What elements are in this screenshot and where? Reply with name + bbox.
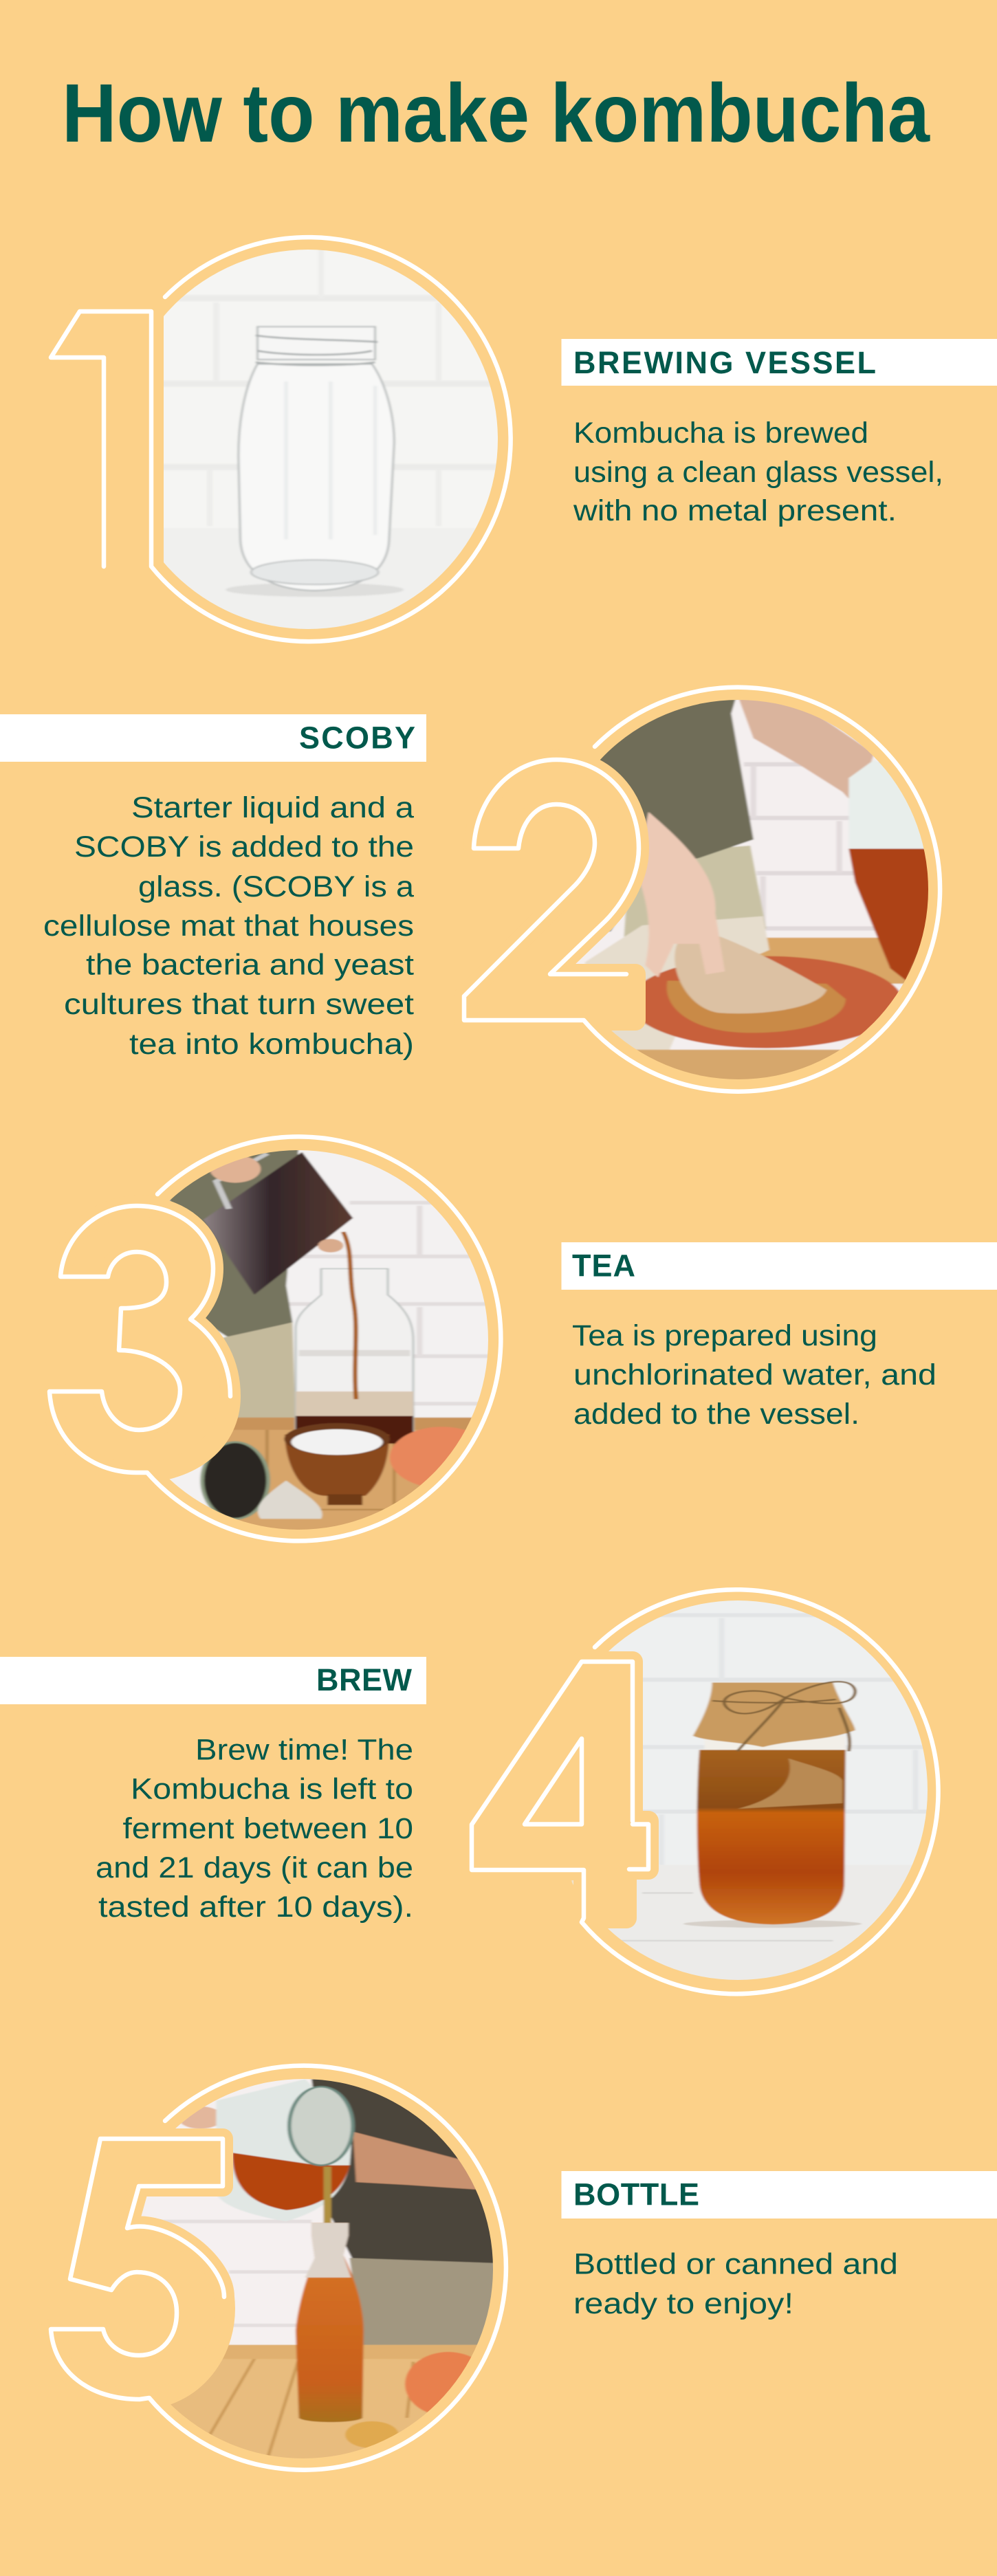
text: scoby description <box>43 791 414 1061</box>
number 1 <box>51 237 511 641</box>
text: brewing vessel description: Kombucha is brewed <box>573 417 868 450</box>
text: brew description: Brew time! The <box>195 1734 413 1767</box>
heading bar: bottle: BOTTLE <box>573 2177 699 2212</box>
photo: jar of kombucha with paper cover <box>571 1600 928 1980</box>
heading bar: scoby <box>0 714 426 762</box>
text: tea description: unchlorinated water, and <box>573 1358 936 1391</box>
number 4 <box>472 1589 939 1994</box>
text: brewing vessel description: with no metal present. <box>573 494 897 527</box>
panel: step 4 brew <box>0 1589 967 1994</box>
text: brew description: tasted after 10 days). <box>98 1891 413 1924</box>
panel: step 2 scoby <box>0 687 967 1092</box>
photo: hand placing scoby on plate <box>576 700 928 1079</box>
heading bar: brew: BREW <box>316 1662 413 1697</box>
text: scoby description: Starter liquid and a <box>131 791 414 824</box>
text: brew description: ferment between 10 <box>122 1812 413 1845</box>
photo: empty glass jar <box>164 250 498 629</box>
number 3 <box>50 1136 501 1541</box>
text: scoby description: SCOBY is added to the <box>74 830 414 863</box>
heading bar: tea: TEA <box>572 1248 635 1284</box>
text: scoby description: glass. (SCOBY is a <box>138 870 414 903</box>
photo: pouring kombucha into bottle <box>142 2079 493 2458</box>
title: How to make kombucha <box>62 66 931 159</box>
text: scoby description: cultures that turn sweet <box>64 988 414 1021</box>
text: tea description: added to the vessel. <box>573 1398 859 1431</box>
panel: step 3 tea <box>50 1136 997 1541</box>
heading bar: scoby: SCOBY <box>299 720 415 755</box>
heading bar: tea <box>561 1242 997 1290</box>
heading bar: brew <box>0 1657 426 1704</box>
text: bottle description: ready to enjoy! <box>573 2287 793 2320</box>
text: scoby description: the bacteria and yeast <box>86 949 414 982</box>
text: brew description: and 21 days (it can be <box>96 1851 413 1884</box>
text: brewing vessel description <box>573 417 943 527</box>
text: brewing vessel description: using a clean glass vessel, <box>573 456 943 489</box>
panel: step 1 brewing vessel <box>51 236 997 651</box>
text: tea description <box>572 1319 936 1431</box>
heading bar: brewing vessel: BREWING VESSEL <box>573 345 876 380</box>
panel: step 5 bottle <box>51 2066 997 2470</box>
text: scoby description: cellulose mat that houses <box>43 910 414 943</box>
text: brew description: Kombucha is left to <box>131 1773 413 1806</box>
number 2 <box>464 687 940 1092</box>
heading bar: bottle <box>561 2171 997 2219</box>
text: bottle description <box>573 2248 898 2320</box>
text: scoby description: tea into kombucha) <box>129 1028 414 1061</box>
number 5 <box>51 2066 506 2470</box>
text: brew description <box>96 1734 413 1924</box>
heading bar: brewing vessel <box>561 339 997 386</box>
text: tea description: Tea is prepared using <box>572 1319 877 1352</box>
text: bottle description: Bottled or canned and <box>573 2248 898 2281</box>
photo: pouring tea into bottle <box>169 1150 488 1530</box>
